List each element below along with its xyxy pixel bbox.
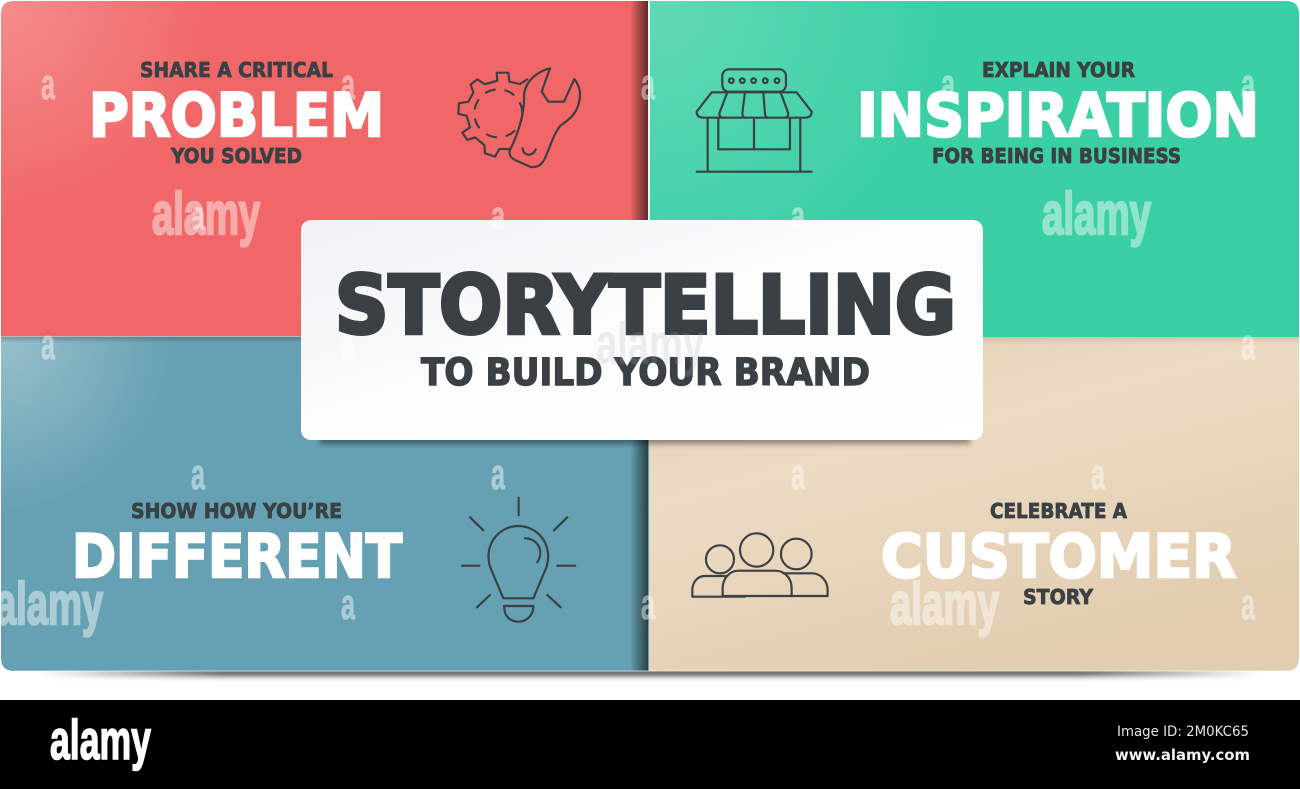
text block: customer: CUSTOMER — [881, 522, 1236, 592]
watermarks: a — [41, 320, 55, 369]
text block: inspiration: EXPLAIN YOUR — [982, 58, 1135, 82]
text block: inspiration: FOR BEING IN BUSINESS — [932, 144, 1181, 168]
text block: problem: SHARE A CRITICAL — [140, 58, 333, 82]
panel: customer — [649, 337, 1299, 671]
watermarks: a — [791, 194, 805, 238]
watermarks: a — [491, 450, 505, 499]
icon: group of people — [692, 533, 828, 597]
panel: inspiration — [648, 0, 1299, 337]
watermarks: a — [641, 60, 655, 109]
watermarks: a — [341, 320, 355, 369]
watermarks: a — [641, 580, 655, 629]
watermarks: a — [341, 60, 355, 109]
text block: problem: PROBLEM — [89, 81, 384, 151]
watermarks: a — [1241, 320, 1255, 369]
footer band — [0, 700, 1300, 789]
watermarks: a — [41, 60, 55, 109]
text block: inspiration — [857, 58, 1259, 168]
text block: problem — [89, 58, 384, 168]
watermarks: a — [1091, 450, 1105, 499]
text block: different — [72, 499, 402, 592]
watermarks: a — [1241, 580, 1255, 629]
panel: different — [1, 337, 650, 671]
center card — [301, 220, 983, 440]
watermarks: alamy — [890, 571, 999, 637]
center card shadow — [320, 434, 970, 444]
watermarks: a — [191, 194, 205, 238]
watermarks: alamy — [0, 571, 103, 637]
watermarks: alamy — [1042, 181, 1151, 247]
watermarks: a — [491, 194, 505, 238]
title: STORYTELLING — [335, 259, 956, 352]
icon: light bulb — [462, 498, 575, 622]
footer logo: alamy — [50, 708, 151, 771]
watermarks: a — [941, 60, 955, 109]
bottom drop shadow under panels — [40, 669, 1260, 676]
text block: customer — [881, 499, 1236, 609]
icon: gear and wrench — [458, 68, 580, 167]
text block: customer: STORY — [1023, 585, 1094, 609]
watermarks: alamy — [596, 311, 704, 377]
subtitle: TO BUILD YOUR BRAND — [421, 351, 870, 394]
watermarks: a — [191, 450, 205, 499]
panel bottom highlight — [14, 670, 1286, 672]
text block: different: DIFFERENT — [72, 522, 402, 592]
text block: problem: YOU SOLVED — [170, 144, 302, 168]
text block: inspiration: INSPIRATION — [857, 81, 1259, 151]
text block: different: SHOW HOW YOU’RE — [131, 499, 342, 523]
image id: Image ID: 2M0KC65 — [1117, 724, 1249, 740]
text block: customer: CELEBRATE A — [990, 499, 1127, 523]
watermarks: a — [1241, 60, 1255, 109]
website: www.alamy.com — [1115, 746, 1250, 764]
icon: storefront — [697, 69, 812, 172]
watermarks: a — [341, 580, 355, 629]
watermarks: a — [791, 450, 805, 499]
watermarks: alamy — [152, 181, 260, 247]
panel: problem — [1, 1, 650, 342]
watermarks — [0, 60, 1255, 637]
